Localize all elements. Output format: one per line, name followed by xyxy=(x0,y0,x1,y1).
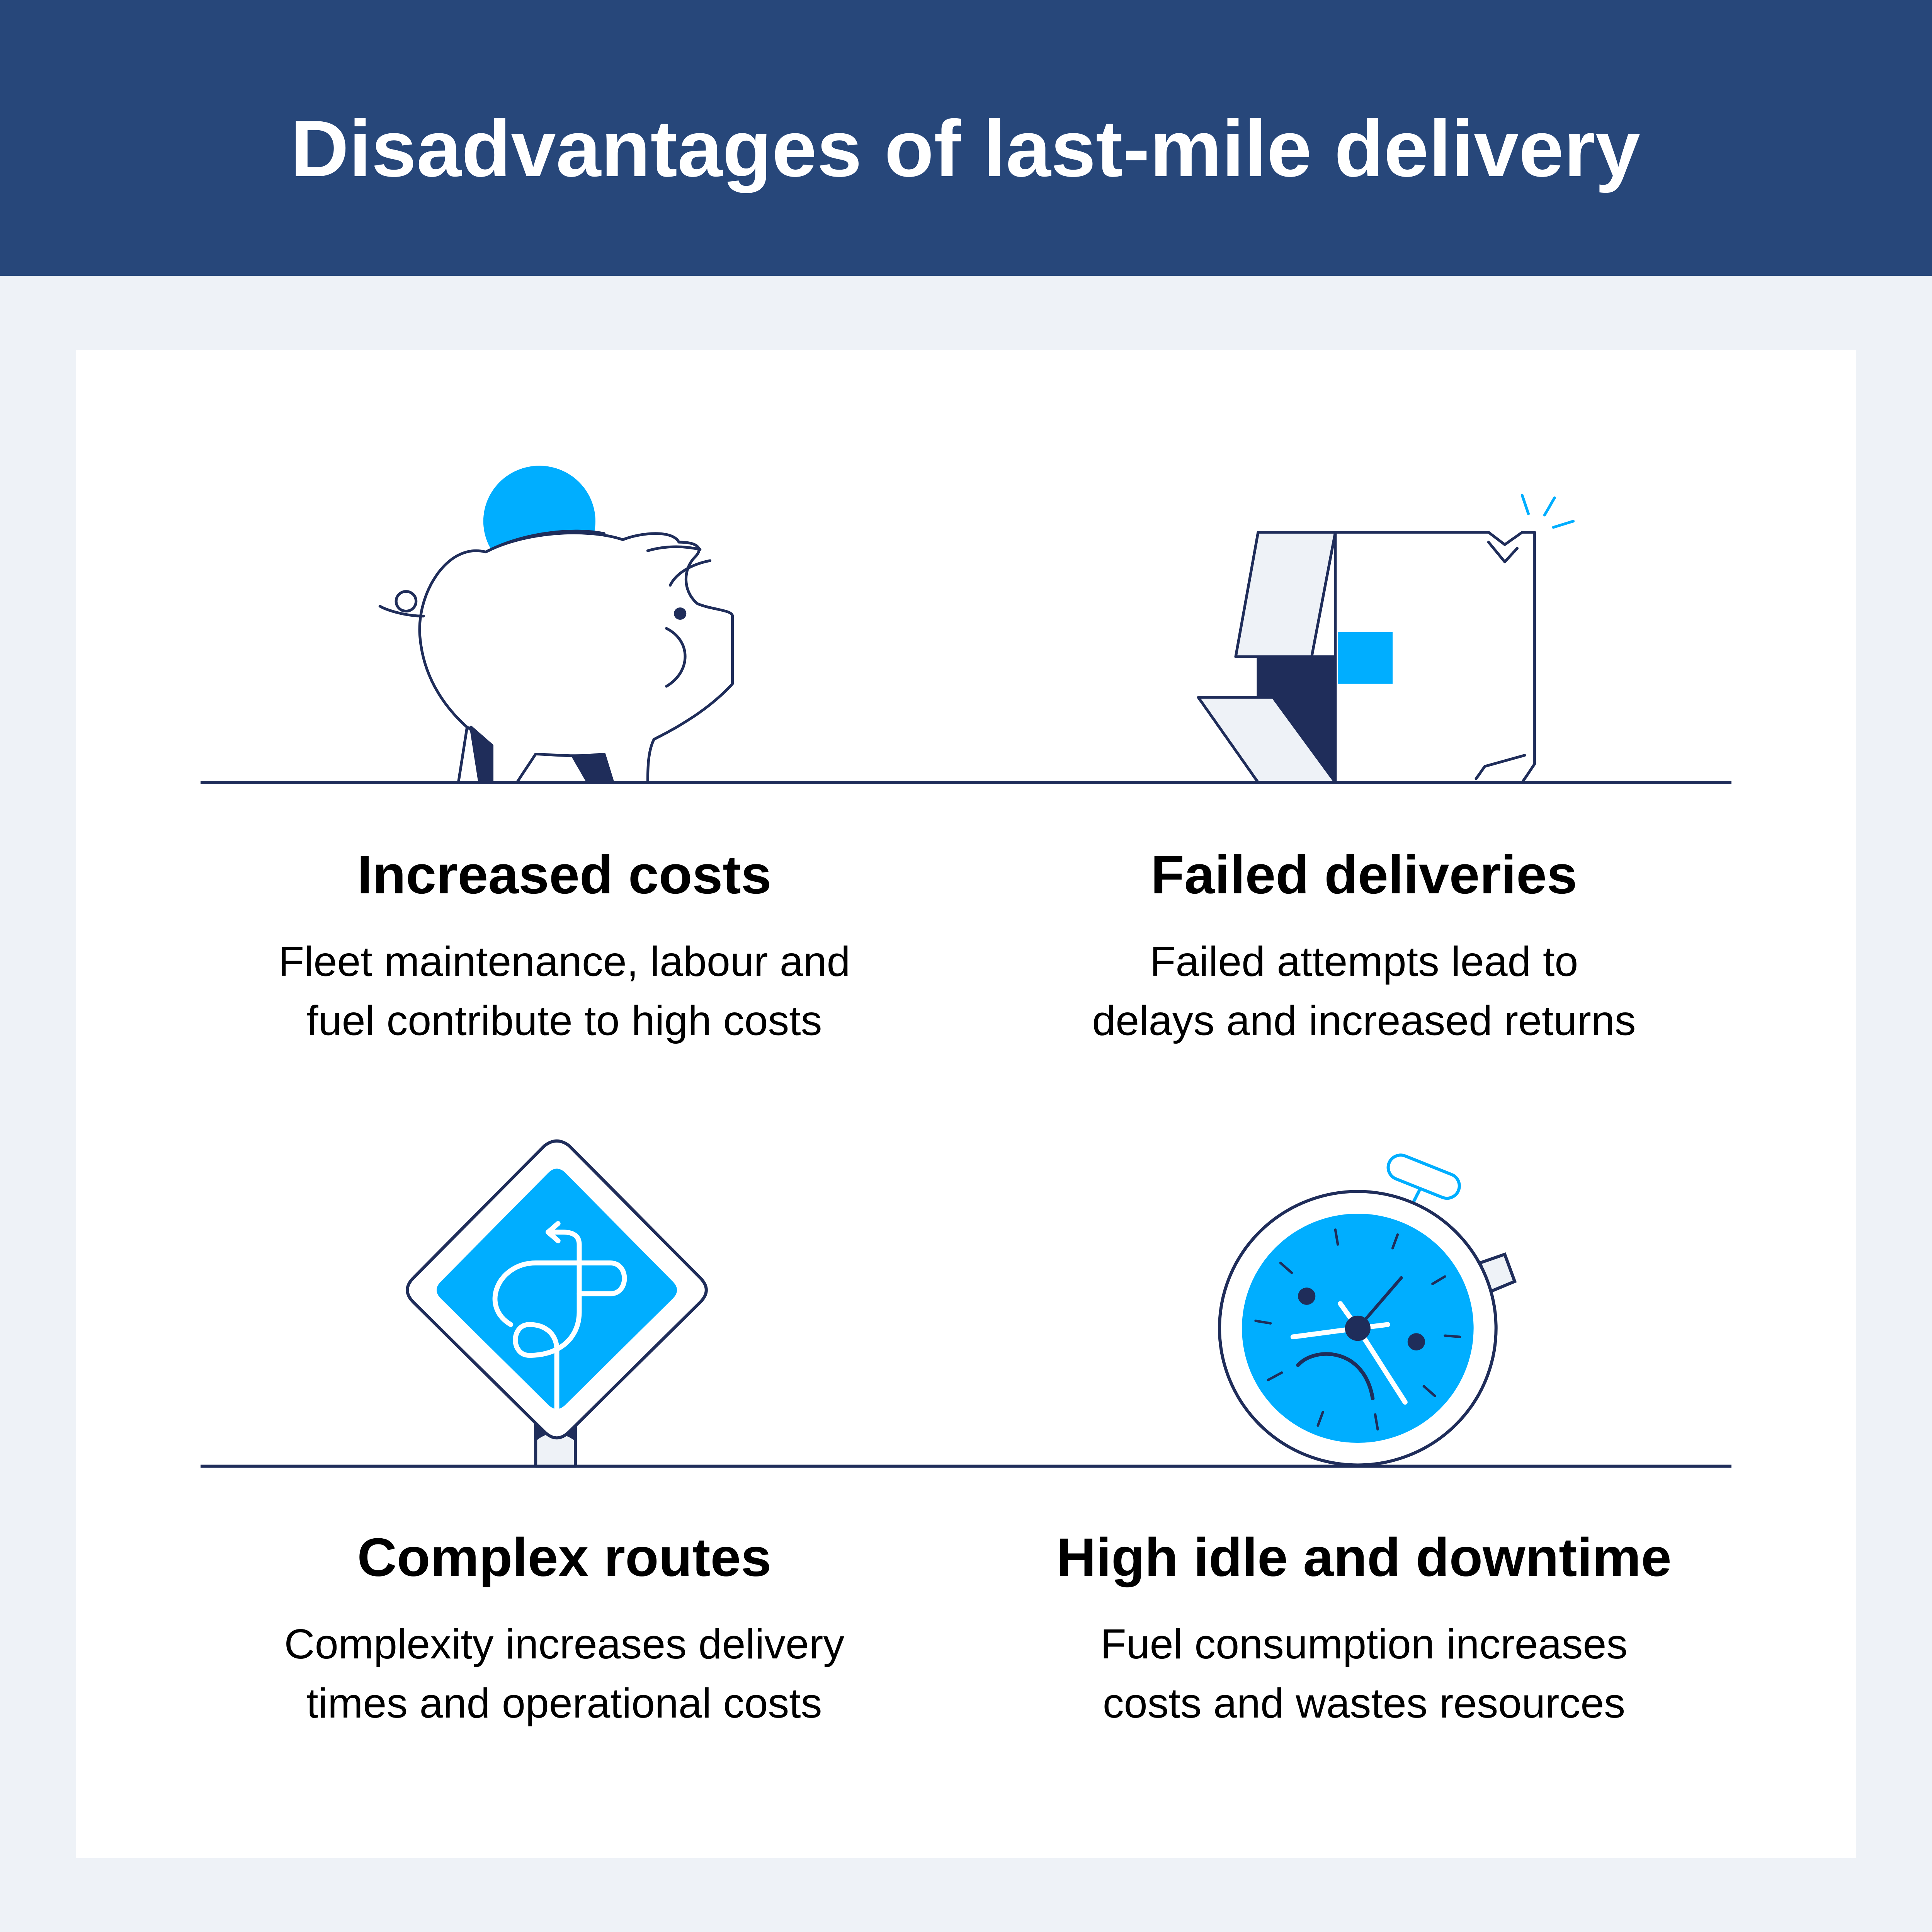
text: complex routes: times and operational costs xyxy=(306,1680,822,1727)
icon: open box xyxy=(1198,495,1573,782)
main panel xyxy=(76,350,1856,1858)
text: increased costs: Increased costs xyxy=(357,844,771,905)
header banner xyxy=(0,0,1932,276)
text: high idle and downtime: High idle and downtime xyxy=(1056,1527,1672,1587)
text: complex routes: Complexity increases delivery xyxy=(284,1621,845,1668)
icon: piggy bank xyxy=(380,466,733,782)
text: high idle and downtime xyxy=(1056,1527,1672,1727)
text: failed deliveries: delays and increased returns xyxy=(1092,997,1636,1044)
text: increased costs xyxy=(278,844,850,1044)
text: increased costs: Fleet maintenance, labour and xyxy=(278,938,850,985)
text: high idle and downtime: Fuel consumption increases xyxy=(1100,1621,1628,1668)
icon: stopwatch xyxy=(1219,1151,1515,1465)
text: failed deliveries xyxy=(1092,844,1636,1044)
title: Disadvantages of last-mile delivery xyxy=(291,104,1640,194)
text: failed deliveries: Failed attempts lead to xyxy=(1150,938,1578,985)
text: failed deliveries: Failed deliveries xyxy=(1151,844,1577,905)
text: increased costs: fuel contribute to high costs xyxy=(306,997,822,1044)
text: complex routes xyxy=(284,1527,845,1727)
text: high idle and downtime: costs and wastes resources xyxy=(1103,1680,1625,1727)
icon: road sign xyxy=(407,1141,706,1466)
text: complex routes: Complex routes xyxy=(357,1527,771,1587)
